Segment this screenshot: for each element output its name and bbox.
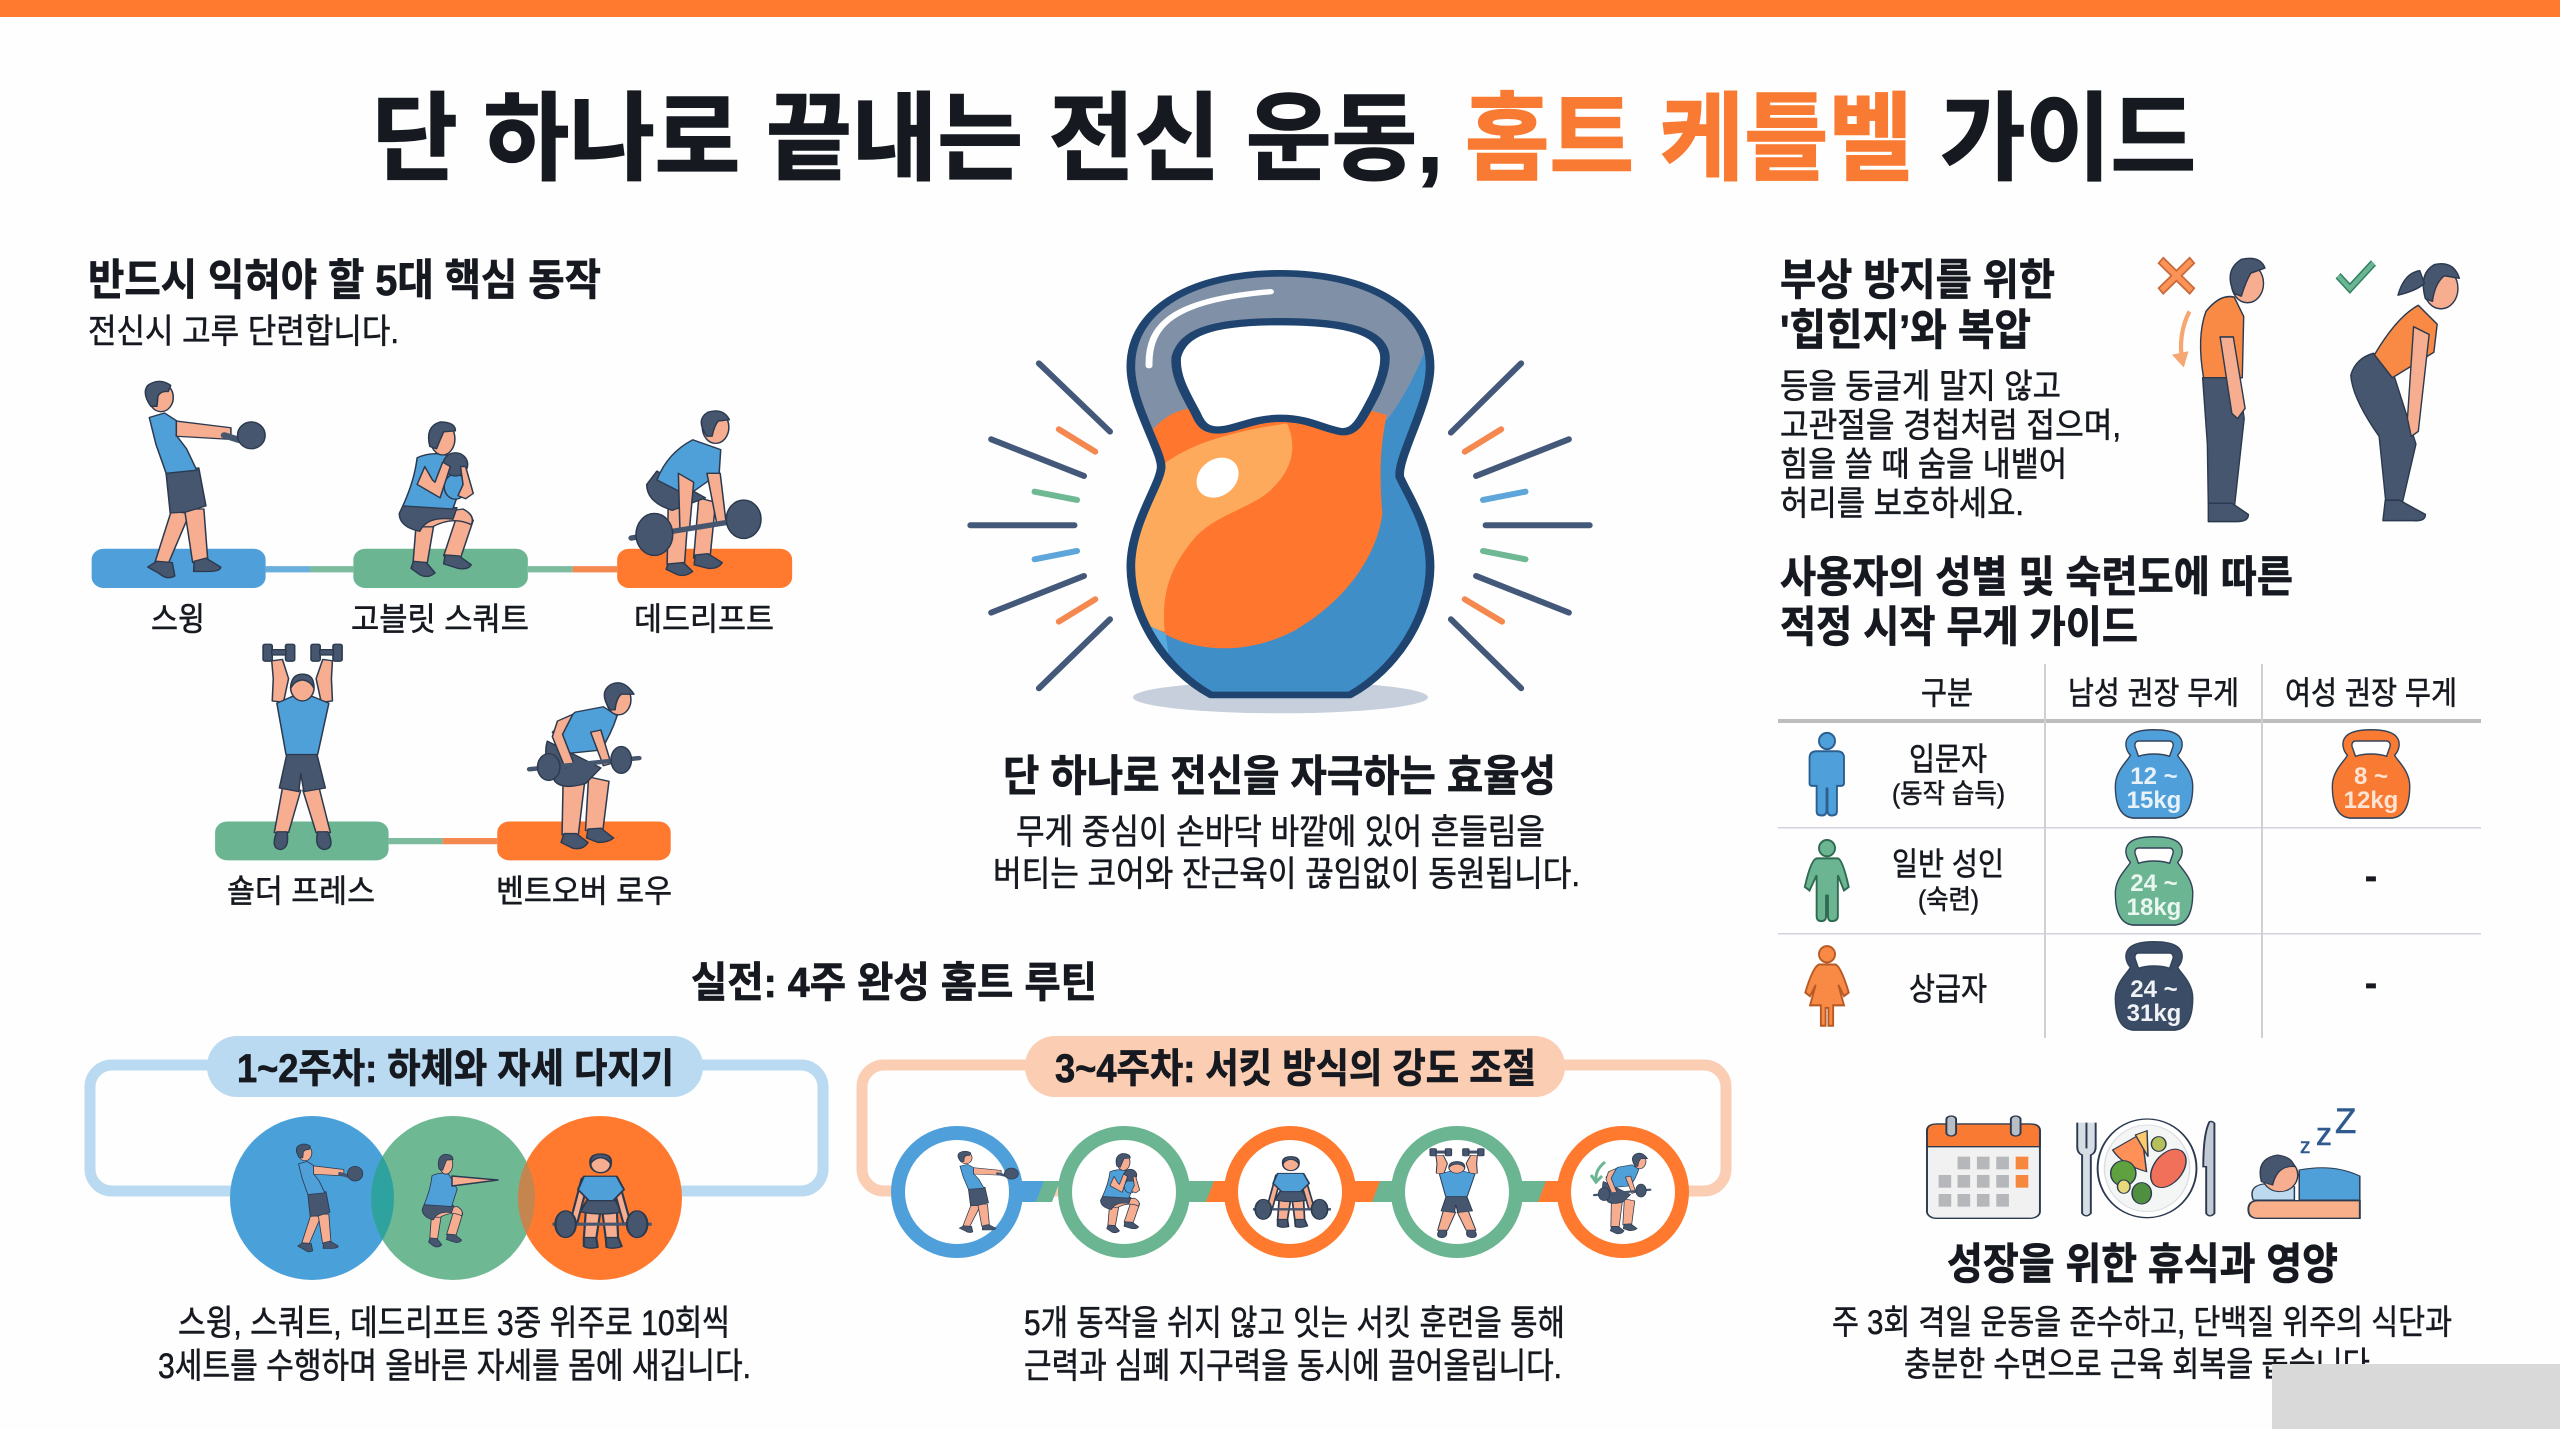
pill heading: weeks 1-2: 1~2주차: 하체와 자세 다지기	[237, 1047, 674, 1091]
body: weeks 3-4: 근력과 심폐 지구력을 동시에 끌어올립니다.	[1024, 1347, 1562, 1386]
hinge illustrations	[2163, 258, 2459, 522]
icon: wrong mark	[2163, 263, 2189, 288]
kettlebell: women 8-12kg: 8 ~	[2354, 763, 2388, 790]
mini figure: deadlift	[1253, 1157, 1331, 1227]
icon: green person	[1805, 840, 1849, 921]
icon: sleeping person	[2248, 1102, 2360, 1218]
figure: swing	[145, 381, 265, 578]
heading: weight guide: 사용자의 성별 및 숙련도에 따른	[1780, 554, 2293, 602]
overlapping circles	[230, 1116, 682, 1280]
heading: core movements: 반드시 익혀야 할 5대 핵심 동작	[88, 257, 601, 305]
heading: weight guide	[1780, 554, 2293, 652]
kettlebell: women 8-12kg	[2332, 730, 2410, 818]
row: beginner: 입문자	[1909, 741, 1987, 777]
row: advanced	[1805, 942, 2377, 1030]
body: weeks 3-4: 5개 동작을 쉬지 않고 잇는 서킷 훈련을 통해	[1024, 1304, 1565, 1343]
icon: sleeping person: z	[2316, 1116, 2332, 1152]
kettlebell: men 24-31kg: 24 ~	[2130, 976, 2178, 1003]
kettlebell: men 24-31kg: 31kg	[2127, 1000, 2181, 1027]
body: weeks 1-2	[158, 1304, 751, 1386]
row: advanced: 상급자	[1909, 971, 1987, 1007]
body: rest and nutrition: 충분한 수면으로 근육 회복을 돕습니다.	[1904, 1346, 2378, 1384]
label: bent-over row: 벤트오버 로우	[496, 873, 672, 909]
gray corner block	[2272, 1364, 2560, 1429]
body: hip hinge: 힘을 쓸 때 숨을 내뱉어	[1780, 446, 2067, 484]
body: efficiency	[993, 813, 1580, 894]
body: hip hinge: 허리를 보호하세요.	[1780, 485, 2024, 523]
icon: sleeping person: Z	[2335, 1102, 2356, 1141]
label: shoulder press: 숄더 프레스	[227, 873, 375, 909]
figure: deadlift	[631, 411, 761, 575]
subheading: 전신시 고루 단련합니다.	[88, 313, 399, 351]
circuit connectors	[1020, 1181, 1562, 1202]
heading: hip hinge	[1780, 257, 2055, 355]
table: starting weight guide	[1778, 664, 2481, 1038]
panel: rest and nutrition	[1832, 1102, 2452, 1384]
label: swing: 스윙	[151, 601, 205, 637]
body: efficiency: 버티는 코어와 잔근육이 끊임없이 동원됩니다.	[993, 855, 1580, 894]
mini figure: press	[1430, 1149, 1484, 1238]
row: beginner	[1810, 730, 2410, 818]
kettlebell: men 24-31kg	[2115, 942, 2193, 1030]
icon: correct mark	[2338, 263, 2373, 288]
heading: hip hinge: '힙힌지’와 복압	[1780, 307, 2031, 355]
panel: weeks 1-2	[90, 1036, 823, 1386]
icon: sleeping person: z	[2300, 1135, 2310, 1158]
kettlebell: men 24-18kg: 24 ~	[2130, 870, 2178, 897]
kettlebell: men 24-18kg	[2115, 837, 2193, 925]
icon: blue person	[1810, 733, 1844, 816]
table header: 구분	[1921, 675, 1973, 711]
panel: hip hinge	[1780, 257, 2459, 523]
figure: goblet squat	[399, 422, 473, 576]
pill heading: weeks 1-2	[207, 1036, 703, 1097]
pill heading: weeks 3-4	[1025, 1036, 1565, 1097]
icon: orange person	[1805, 946, 1849, 1026]
icon: plate with fork and knife	[2077, 1119, 2214, 1218]
mini figure: swing	[958, 1151, 1018, 1233]
kettlebell: men 24-18kg: 18kg	[2127, 894, 2181, 921]
body: rest and nutrition: 주 3회 격일 운동을 준수하고, 단백질 위주의 식단과	[1832, 1304, 2452, 1342]
body: weeks 3-4	[1024, 1304, 1565, 1386]
heading: hip hinge: 부상 방지를 위한	[1780, 257, 2055, 305]
mini figure: swing	[296, 1144, 363, 1252]
figure: hip hinge	[2351, 264, 2459, 521]
figure: rounded back	[2172, 258, 2265, 522]
body: rest and nutrition	[1832, 1304, 2452, 1384]
icon: central kettlebell with rays	[970, 267, 1590, 713]
kettlebell: men 12-15kg	[2115, 730, 2193, 818]
circuit rings	[898, 1133, 1682, 1251]
mini figure: deadlift	[552, 1154, 652, 1248]
title: 단 하나로 끝내는 전신 운동,	[372, 86, 1443, 193]
table header: 여성 권장 무게	[2285, 675, 2457, 711]
mini figure: goblet squat	[1101, 1153, 1140, 1233]
label: goblet squat: 고블릿 스쿼트	[351, 601, 529, 637]
panel: 5 core movements	[88, 257, 792, 909]
body: hip hinge	[1780, 368, 2121, 523]
table header: 남성 권장 무게	[2068, 675, 2239, 711]
title	[372, 86, 2196, 193]
mini figure: row with arrow	[1591, 1153, 1650, 1234]
heading: weight guide: 적정 시작 무게 가이드	[1780, 604, 2138, 652]
mini figure: squat	[422, 1154, 498, 1247]
table header	[1921, 675, 2457, 711]
row: adult: (숙련)	[1918, 885, 1979, 915]
row: beginner: (동작 습득)	[1892, 779, 2005, 809]
top accent bar	[0, 0, 2560, 17]
figure: bent-over row	[529, 683, 639, 849]
dash: women adult: -	[2365, 855, 2377, 896]
kettlebell: men 12-15kg: 12 ~	[2130, 763, 2178, 790]
platforms and connectors, first row	[92, 549, 792, 588]
body: hip hinge: 등을 둥글게 말지 않고	[1780, 368, 2061, 406]
row: adult	[1805, 837, 2377, 925]
panel: weeks 3-4	[862, 1036, 1726, 1386]
heading: 4-week routine: 실전: 4주 완성 홈트 루틴	[691, 959, 1097, 1006]
figure: shoulder press	[263, 644, 342, 850]
kettlebell: men 12-15kg: 15kg	[2127, 787, 2181, 814]
heading: efficiency: 단 하나로 전신을 자극하는 효율성	[1003, 753, 1556, 801]
platforms and connectors, second row	[215, 821, 671, 860]
pill heading: weeks 3-4: 3~4주차: 서킷 방식의 강도 조절	[1055, 1047, 1536, 1091]
body: hip hinge: 고관절을 경첩처럼 접으며,	[1780, 407, 2121, 445]
heading: rest and nutrition: 성장을 위한 휴식과 영양	[1947, 1241, 2338, 1289]
title: 가이드	[1940, 86, 2196, 193]
body: weeks 1-2: 3세트를 수행하며 올바른 자세를 몸에 새깁니다.	[158, 1347, 751, 1386]
exercise diagram	[92, 381, 792, 860]
body: weeks 1-2: 스윙, 스쿼트, 데드리프트 3중 위주로 10회씩	[178, 1304, 730, 1343]
panel: efficiency text	[993, 753, 1580, 894]
kettlebell: women 8-12kg: 12kg	[2344, 787, 2398, 814]
icon: calendar	[1927, 1116, 2040, 1218]
row: adult: 일반 성인	[1892, 846, 2004, 882]
label: deadlift: 데드리프트	[634, 601, 774, 637]
dash: women advanced: -	[2365, 962, 2377, 1003]
title: 홈트 케틀벨	[1465, 86, 1913, 193]
body: efficiency: 무게 중심이 손바닥 바깥에 있어 흔들림을	[1016, 813, 1545, 852]
